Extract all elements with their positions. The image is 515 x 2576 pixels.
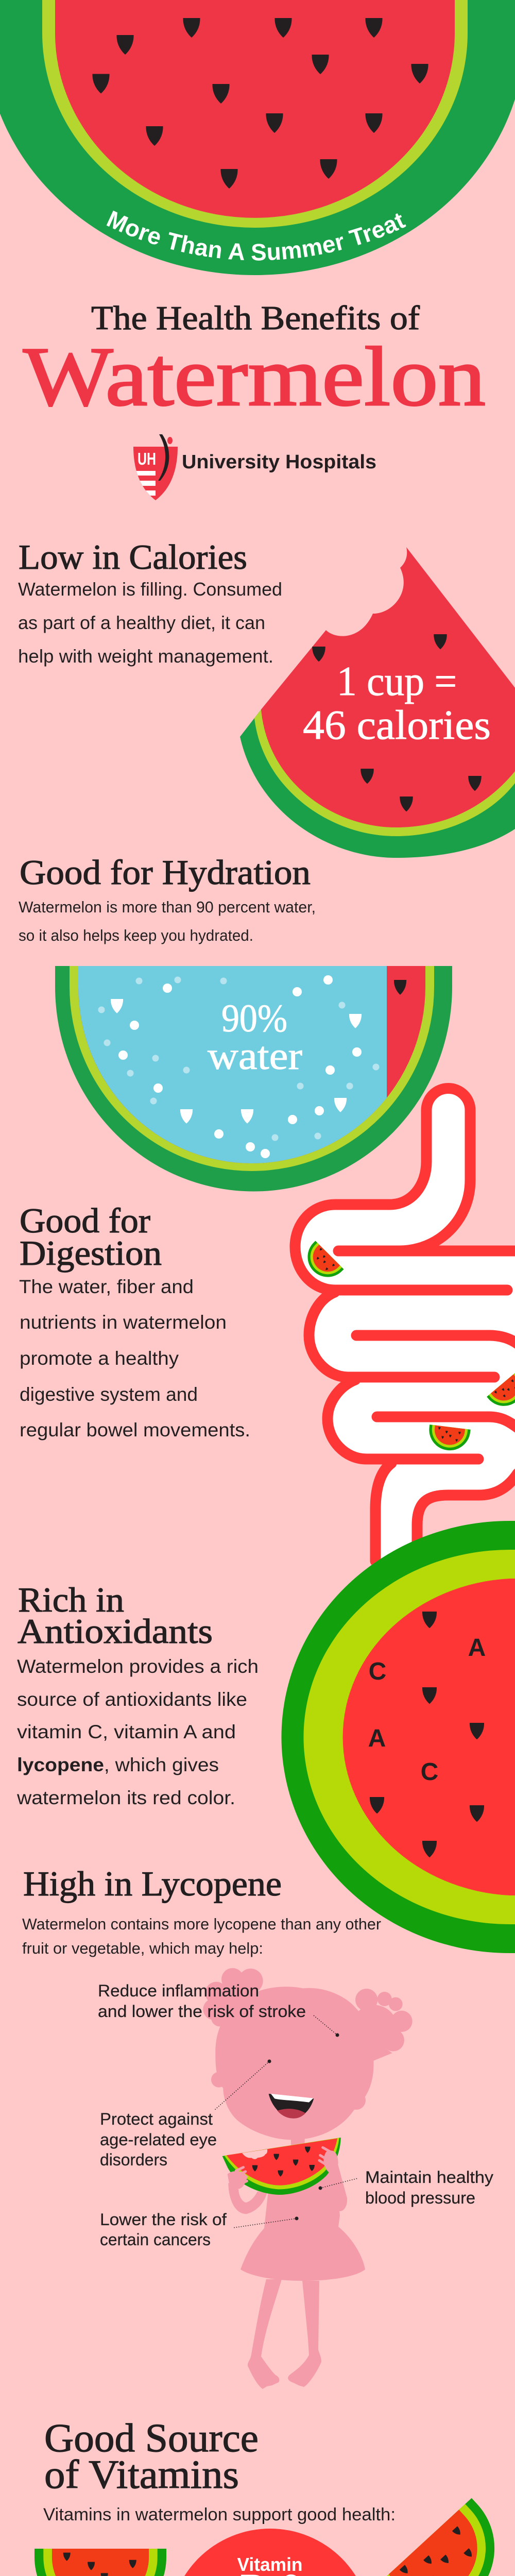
callout: blood pressure: Maintain healthy xyxy=(365,2168,493,2187)
90% water label xyxy=(208,997,302,1078)
title: The Health Benefits of xyxy=(91,299,420,337)
90% water label: water xyxy=(208,1035,302,1078)
body text xyxy=(19,1276,250,1440)
section: high in lycopene xyxy=(22,1864,381,1957)
section: good for digestion xyxy=(19,1201,250,1440)
dress and legs xyxy=(241,2169,365,2389)
heading: High in Lycopene xyxy=(23,1864,282,1903)
curved tagline: More Than A Summer Treat xyxy=(106,210,406,261)
head, hair buns and arms xyxy=(203,1968,413,2214)
heading: Good Source xyxy=(44,2415,259,2460)
hero watermelon xyxy=(0,0,515,275)
pale droplets xyxy=(98,977,379,1141)
body text: promote a healthy xyxy=(20,1348,179,1369)
body text: Watermelon is filling. Consumed xyxy=(18,579,282,600)
callout: eye disorders: disorders xyxy=(100,2150,167,2169)
body text: watermelon its red color. xyxy=(16,1787,235,1808)
bitten watermelon slice xyxy=(240,547,515,858)
water droplets xyxy=(111,975,362,1158)
vitamin letters: A xyxy=(468,1634,486,1662)
heading: Digestion xyxy=(20,1233,162,1273)
callout: 1 cup = 46 calories: 46 calories xyxy=(303,703,491,748)
callout: 1 cup = 46 calories: 1 cup = xyxy=(337,659,457,704)
vitamin letters: A xyxy=(368,1725,386,1752)
body text: Vitamins in watermelon support good health: xyxy=(43,2505,396,2524)
callout: blood pressure: blood pressure xyxy=(365,2189,475,2207)
vitamin letters: C xyxy=(421,1758,438,1786)
body text: nutrients in watermelon xyxy=(20,1312,227,1333)
callout: certain cancers: Lower the risk of xyxy=(100,2210,227,2229)
body text: fruit or vegetable, which may help: xyxy=(22,1939,263,1957)
body text xyxy=(18,579,282,667)
water-filled watermelon xyxy=(55,966,452,1192)
body text: help with weight management. xyxy=(18,646,273,667)
callout: inflammation and stroke xyxy=(98,1981,306,2021)
logo: University Hospitals xyxy=(131,434,376,500)
body text xyxy=(22,1915,381,1957)
callout: inflammation and stroke: and lower the risk of stroke xyxy=(98,2002,306,2021)
body text xyxy=(19,898,316,944)
90% water label: 90% xyxy=(221,997,287,1040)
antioxidant watermelon with vitamin letters xyxy=(281,1521,515,1953)
heading xyxy=(44,2415,259,2497)
callout: blood pressure xyxy=(365,2168,493,2207)
callout dots and leader lines xyxy=(214,2015,358,2228)
watermelon held by pink girl xyxy=(222,2138,341,2195)
body text: The water, fiber and xyxy=(19,1276,194,1297)
callout: 1 cup = 46 calories xyxy=(303,659,491,748)
title xyxy=(23,299,486,423)
section: good source of vitamins xyxy=(43,2415,396,2524)
body text: Watermelon contains more lycopene than any other xyxy=(22,1915,381,1933)
heading: of Vitamins xyxy=(44,2452,239,2497)
heading xyxy=(18,1580,213,1651)
section: low in calories xyxy=(18,537,282,667)
mouth xyxy=(269,2094,314,2119)
callout: eye disorders: Protect against xyxy=(100,2110,213,2128)
body text: regular bowel movements. xyxy=(20,1419,250,1440)
callout: eye disorders: age-related eye xyxy=(100,2130,217,2149)
heading: Antioxidants xyxy=(18,1612,213,1651)
callout: certain cancers: certain cancers xyxy=(100,2230,211,2249)
body text: Watermelon is more than 90 percent water, xyxy=(19,898,316,916)
title: Watermelon xyxy=(23,330,486,423)
callout: eye disorders xyxy=(100,2110,217,2169)
body text: lycopene, which gives xyxy=(17,1754,219,1775)
body text: vitamin C, vitamin A and xyxy=(17,1721,236,1742)
pink girl silhouette xyxy=(98,1968,493,2389)
mini watermelon slices xyxy=(299,1241,515,1453)
body text: digestive system and xyxy=(20,1384,198,1405)
vitamin B-6 circle: Vitamin xyxy=(237,2554,303,2575)
section: rich in antioxidants xyxy=(16,1580,259,1808)
heading xyxy=(20,1201,162,1273)
decorative watermelon slices xyxy=(35,2498,515,2576)
body text: so it also helps keep you hydrated. xyxy=(19,926,253,944)
body text xyxy=(16,1656,259,1808)
vitamin B-6 circle xyxy=(169,2529,371,2576)
vitamin letters xyxy=(368,1634,486,1786)
heading: Rich in xyxy=(18,1580,124,1619)
callout: inflammation and stroke: Reduce inflammation xyxy=(98,1981,259,2000)
body text: source of antioxidants like xyxy=(17,1689,247,1710)
callout: certain cancers xyxy=(100,2210,227,2249)
heading: Good for xyxy=(20,1201,150,1240)
logo: University Hospitals: UH xyxy=(138,449,156,468)
vitamin letters: C xyxy=(369,1658,386,1685)
heading: Low in Calories xyxy=(19,537,247,577)
body text: as part of a healthy diet, it can xyxy=(18,612,265,633)
logo: University Hospitals: University Hospitals xyxy=(182,451,376,473)
body text: Watermelon provides a rich xyxy=(17,1656,259,1677)
intestines illustration xyxy=(295,1088,515,1561)
heading: Good for Hydration xyxy=(20,853,311,892)
section: good for hydration xyxy=(19,853,316,944)
